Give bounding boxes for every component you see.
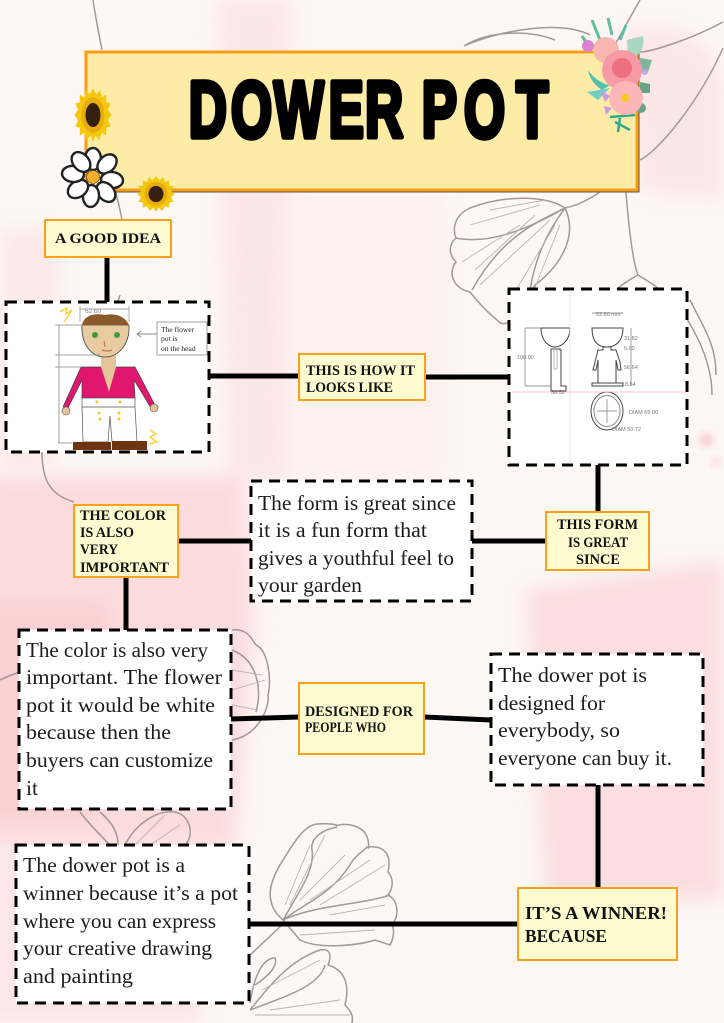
sketch figure: The flower: [161, 325, 195, 334]
panel: technical drawing: DIAM 65.00: [629, 410, 658, 416]
title: DOWER POT: [189, 66, 548, 155]
sketch figure: on the head: [161, 344, 196, 353]
text block: why it wins: The dower pot is a: [23, 853, 185, 877]
label: a good idea: [45, 220, 171, 257]
label: it's a winner because: BECAUSE: [525, 926, 607, 946]
text block: color explanation: because then the: [26, 720, 171, 744]
panel: technical drawing: 8.54: [625, 382, 636, 388]
text block: why it wins: your creative drawing: [23, 936, 212, 960]
label: it's a winner because: [518, 888, 677, 960]
label: the color is also very important: [74, 505, 178, 577]
flower: beside color panel: [0, 630, 270, 740]
label: the color is also very important: IMPORTANT: [80, 560, 169, 576]
panel: technical drawing: DIAM 50.72: [612, 427, 641, 433]
label: this is how it looks like: [299, 354, 425, 400]
text block: color explanation: it: [26, 776, 38, 800]
label: designed for people who: PEOPLE WHO: [305, 720, 386, 736]
text block: color explanation: pot it would be white: [26, 693, 215, 717]
title banner: [86, 52, 639, 192]
flower: upper right: [42, 0, 723, 502]
text block: designed for everybody: designed for: [498, 691, 605, 715]
text block: form reason: gives a youthful feel to: [258, 546, 454, 570]
label: this form is great since: [546, 512, 649, 570]
text block: designed for everybody: The dower pot is: [498, 663, 647, 687]
text block: designed for everybody: everyone can buy it.: [498, 746, 672, 770]
panel: technical drawing: 100.00: [517, 355, 534, 361]
text block: form reason: it is a fun form that: [258, 518, 427, 542]
text block: color explanation: important. The flower: [26, 665, 222, 689]
label: this form is great since: THIS FORM: [557, 517, 638, 533]
icon: sunflower top: [75, 88, 111, 142]
panel: technical drawing: 5.00: [624, 346, 635, 352]
flower: between lower panels: [80, 812, 190, 845]
sketch figure: [55, 306, 207, 450]
flower: lower centre: [250, 824, 397, 955]
label: this form is great since: SINCE: [576, 552, 620, 568]
label: the color is also very important: THE COLOR: [80, 508, 167, 524]
label: the color is also very important: IS ALSO: [80, 525, 134, 541]
text block: why it wins: winner because it’s a pot: [23, 881, 238, 905]
text block: designed for everybody: [491, 654, 703, 785]
label: a good idea: A GOOD IDEA: [55, 231, 162, 247]
label: designed for people who: DESIGNED FOR: [305, 704, 414, 720]
technical drawing: [512, 290, 686, 464]
text block: designed for everybody: everybody, so: [498, 718, 620, 742]
text block: color explanation: The color is also very: [26, 638, 208, 662]
panel: technical drawing: 62.60 mm: [596, 312, 621, 318]
panel: technical drawing: 31.82: [624, 336, 638, 342]
label: this is how it looks like: THIS IS HOW IT: [306, 363, 415, 379]
icon: sunflower bottom: [138, 176, 174, 212]
flower: bottom centre: [250, 950, 352, 1023]
sketch figure: pot is: [161, 334, 178, 343]
sketch figure: 62.60: [85, 308, 102, 315]
text block: why it wins: where you can express: [23, 909, 216, 933]
panel: technical drawing: [509, 289, 687, 465]
text block: why it wins: [16, 845, 249, 1003]
label: it's a winner because: IT’S A WINNER!: [525, 903, 667, 923]
icon: floral bouquet: [582, 18, 652, 132]
text block: color explanation: buyers can customize: [26, 748, 213, 772]
label: designed for people who: [299, 683, 424, 754]
text block: color explanation: [19, 630, 231, 809]
label: the color is also very important: VERY: [80, 542, 118, 558]
text block: why it wins: and painting: [23, 964, 133, 988]
panel: technical drawing: 36.52: [551, 390, 565, 396]
panel: technical drawing: 56.64: [624, 365, 638, 371]
panel: sketch of the pot character: [6, 302, 209, 452]
text block: form reason: The form is great since: [258, 491, 456, 515]
text block: form reason: your garden: [258, 573, 362, 597]
text block: form reason: [251, 481, 472, 601]
connectors: [107, 256, 598, 924]
icon: daisy: [61, 148, 124, 208]
label: this is how it looks like: LOOKS LIKE: [306, 380, 393, 396]
label: this form is great since: IS GREAT: [568, 535, 628, 551]
